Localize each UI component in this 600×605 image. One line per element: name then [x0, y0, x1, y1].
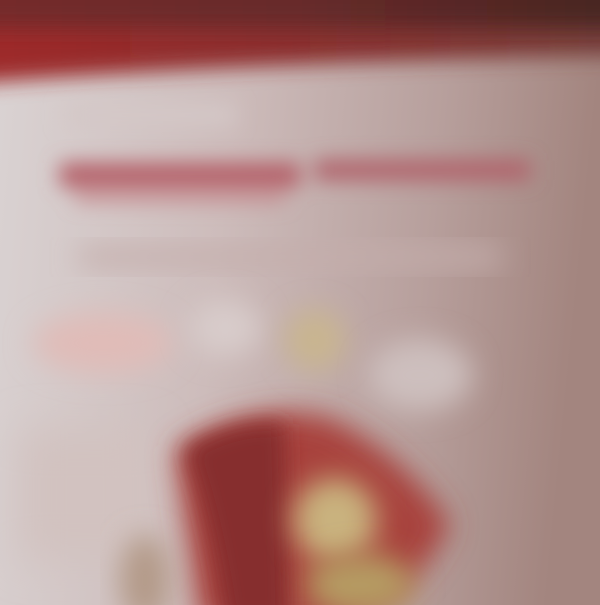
pink callout blob — [33, 313, 173, 373]
header band — [0, 0, 600, 84]
figure: yellow lower — [305, 553, 415, 605]
white callout blob — [368, 339, 472, 411]
figure: dark red sleeve — [185, 423, 290, 605]
figure: yellow highlight — [293, 478, 377, 562]
figure: red body — [175, 412, 450, 605]
figure: tan left edge — [120, 535, 170, 605]
small heading tag — [65, 105, 235, 125]
central figure — [120, 412, 450, 605]
yellow icon blob — [285, 310, 345, 370]
white icon blob — [189, 300, 261, 356]
title — [60, 160, 530, 202]
subtitle text block — [80, 248, 500, 266]
lower left tint — [20, 430, 150, 560]
